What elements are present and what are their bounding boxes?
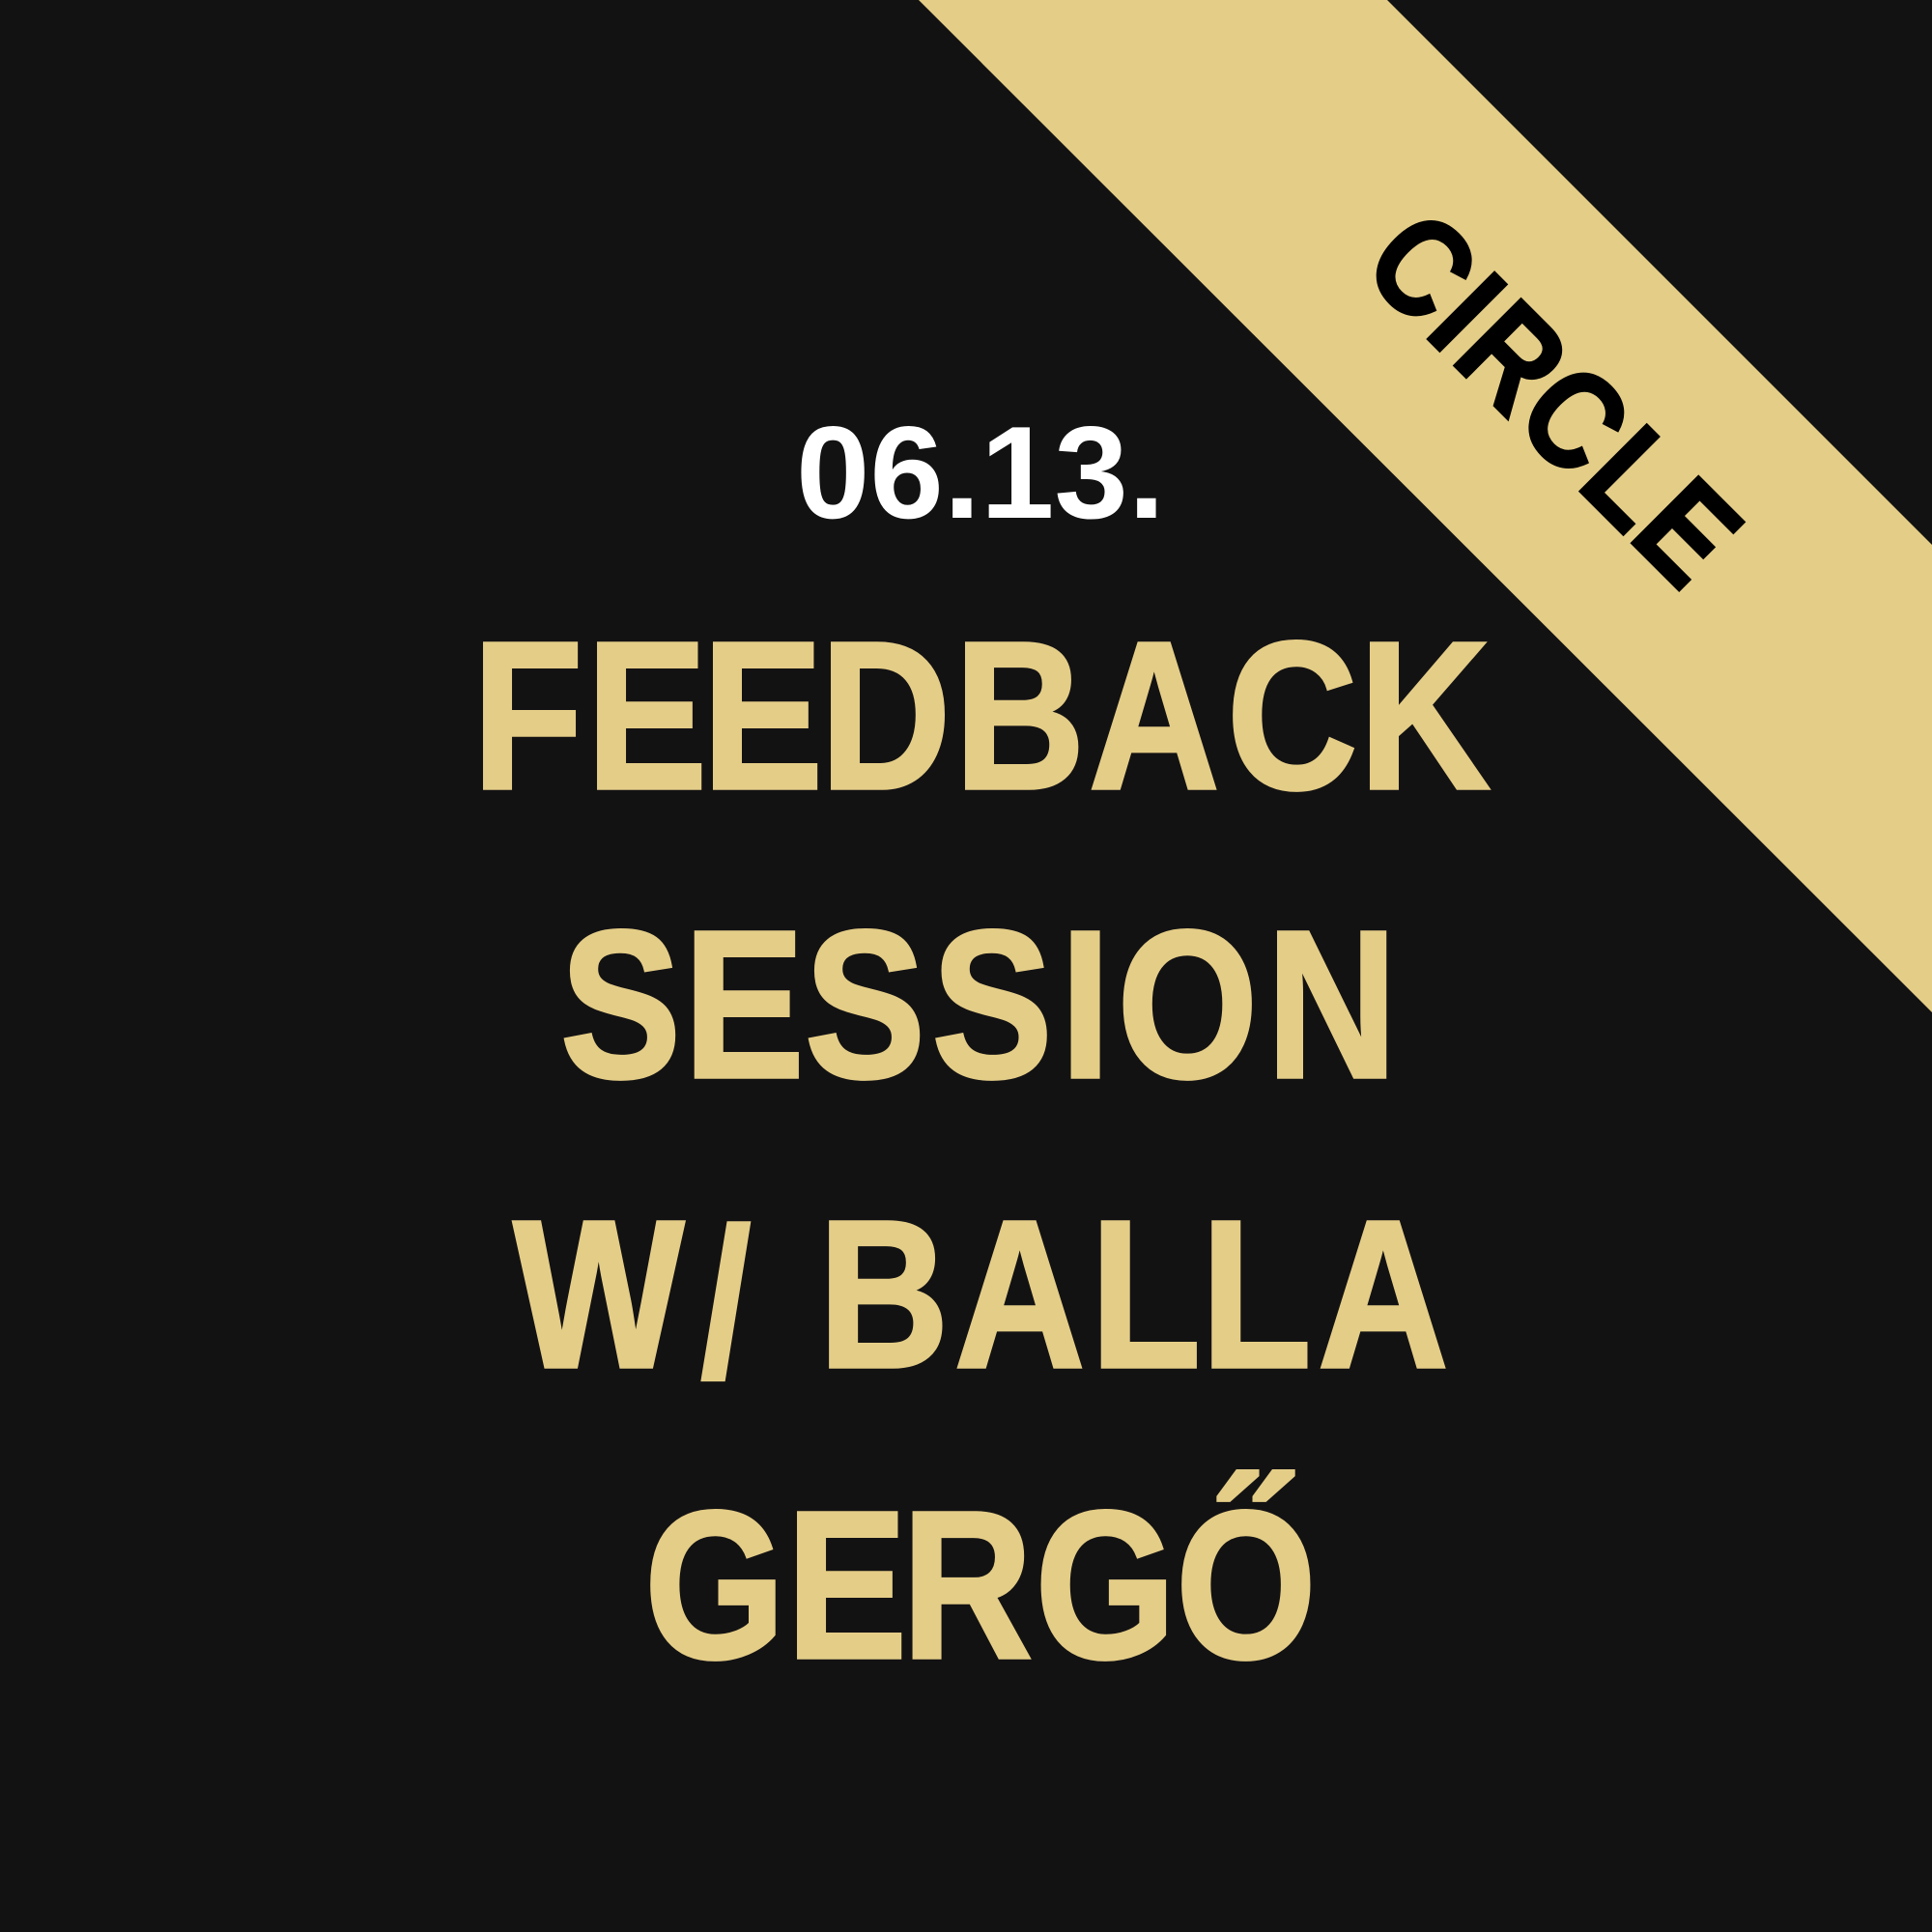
title line: GERGŐ: GERGŐ bbox=[644, 1468, 1317, 1703]
date: 06.13. bbox=[796, 399, 1165, 546]
title line: FEEDBACK: FEEDBACK bbox=[472, 599, 1490, 834]
title line: W/ BALLA: W/ BALLA bbox=[513, 1178, 1449, 1421]
title line: SESSION: SESSION bbox=[560, 888, 1397, 1122]
diagonal banner bbox=[919, 0, 1932, 1012]
banner label: CIRCLE: CIRCLE bbox=[1337, 183, 1770, 615]
